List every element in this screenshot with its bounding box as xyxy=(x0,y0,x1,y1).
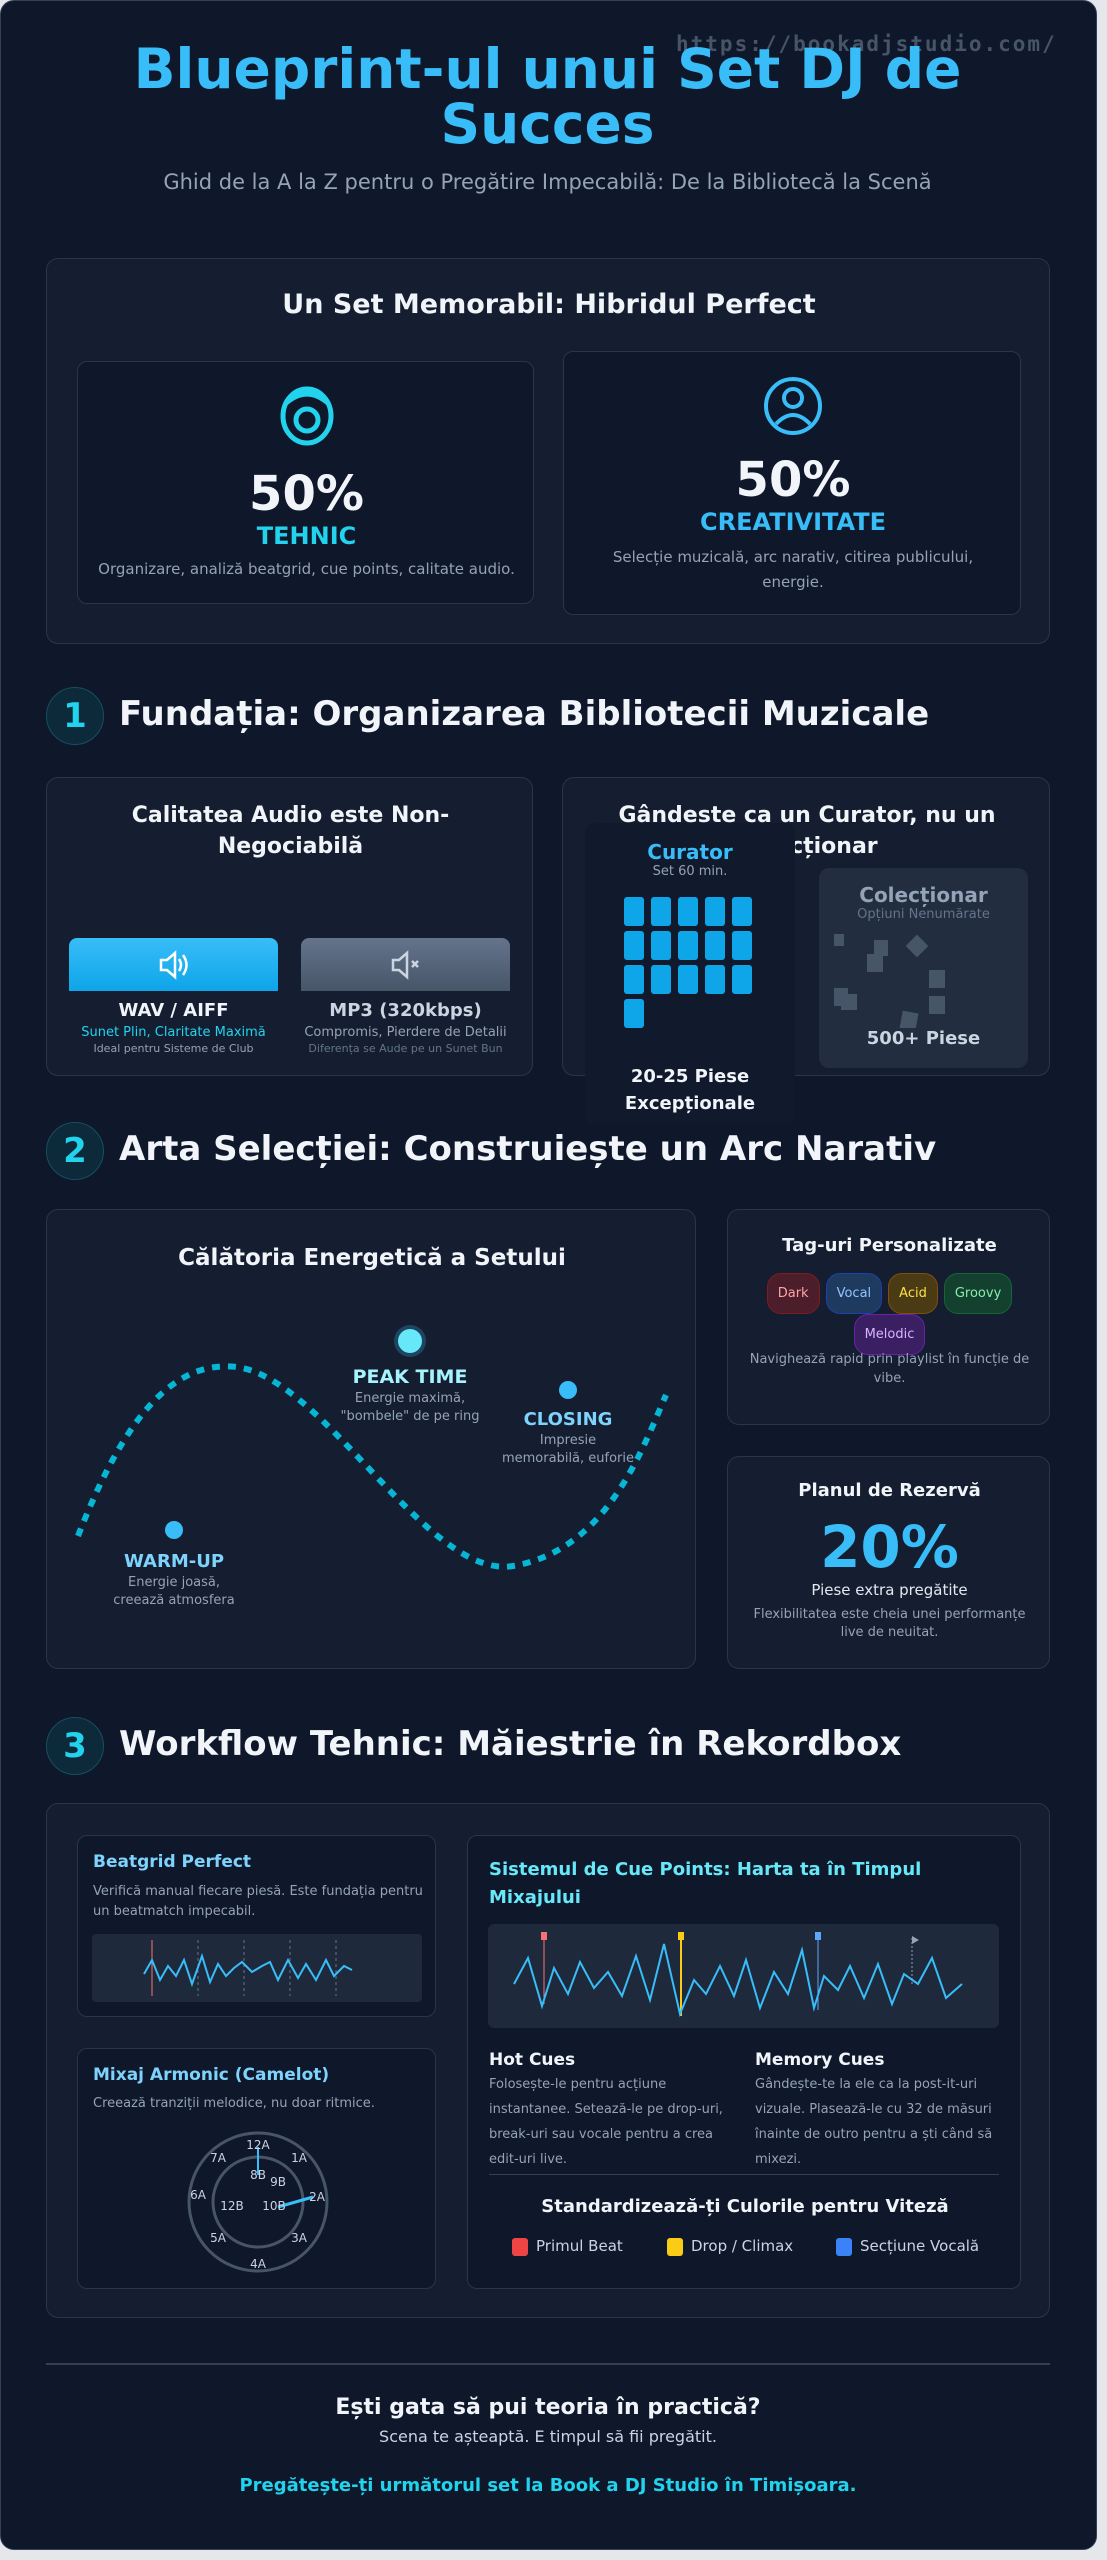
footer cta: Ești gata să pui teoria în practică? xyxy=(335,2395,761,2420)
label peak time: "bombele" de pe ring xyxy=(340,1409,480,1424)
audio heading: Calitatea Audio este Non-Negociabilă xyxy=(132,803,449,859)
stat 50%: 50% xyxy=(249,466,364,522)
title: Blueprint-ul unui Set DJ de xyxy=(134,37,961,101)
track grid xyxy=(624,897,752,1028)
desc: Organizare, analiză beatgrid, cue points, calitate audio. xyxy=(98,560,515,578)
energy curve chart xyxy=(75,1325,669,1570)
label warm-up xyxy=(113,1551,235,1608)
card: camelot: Creează tranziții melodice, nu doar ritmice. xyxy=(93,2096,375,2111)
badge 2 xyxy=(46,1122,104,1180)
title: Succes xyxy=(440,92,654,156)
section 3 header xyxy=(46,1717,901,1775)
card: beatgrid xyxy=(77,1835,436,2017)
hot cues: Hot Cues xyxy=(489,2050,575,2070)
camelot wheel: 10B xyxy=(262,2199,286,2213)
panel: tags xyxy=(727,1209,1050,1425)
panel: energy journey xyxy=(46,1209,696,1669)
label mp3: MP3 (320kbps) xyxy=(329,1000,482,1021)
badge 2: 2 xyxy=(63,1131,87,1171)
scattered squares xyxy=(834,934,945,1028)
color legend xyxy=(512,2237,979,2256)
curator heading: Gândește ca un Curator, nu un Colecționar xyxy=(618,803,996,859)
label peak time xyxy=(340,1366,480,1424)
url watermark: https://bookadjstudio.com/ xyxy=(676,32,1057,56)
camelot wheel: 3A xyxy=(291,2231,308,2245)
icon: gear/headphone xyxy=(280,386,334,446)
badge 1 xyxy=(46,687,104,745)
footer cta: Scena te așteaptă. E timpul să fii pregătit. xyxy=(379,2427,717,2446)
panel: audio quality xyxy=(46,777,533,1076)
hybrid heading: Un Set Memorabil: Hibridul Perfect xyxy=(282,289,816,320)
label warm-up: WARM-UP xyxy=(124,1551,224,1572)
camelot wheel: 8B xyxy=(250,2168,266,2182)
panel: workflow xyxy=(46,1803,1050,2318)
badge 3 xyxy=(46,1717,104,1775)
title xyxy=(134,37,961,156)
card: beatgrid: Verifică manual fiecare piesă. Este fundația pentru un beatmatch impecabil. xyxy=(93,1884,423,1919)
color legend: Drop / Climax xyxy=(691,2237,793,2255)
label mp3: Diferența se Aude pe un Sunet Bun xyxy=(308,1042,503,1055)
beatgrid wave xyxy=(92,1934,422,2002)
color legend: Primul Beat xyxy=(536,2237,623,2255)
box: curator: Curator xyxy=(647,840,733,864)
label tehnic: TEHNIC xyxy=(257,522,356,550)
footer cta: Pregătește-ți următorul set la Book a DJ Studio în Timișoara. xyxy=(239,2475,857,2496)
label peak time: Energie maximă, xyxy=(355,1391,465,1406)
box: colectionar xyxy=(819,868,1028,1068)
memory cues: Memory Cues xyxy=(755,2050,884,2070)
card: beatgrid: Beatgrid Perfect xyxy=(93,1852,251,1872)
card: tehnic xyxy=(77,361,534,604)
panel: hybrid xyxy=(46,258,1050,644)
camelot wheel: 12A xyxy=(246,2138,271,2152)
tag chips: Groovy xyxy=(955,1286,1001,1301)
tags heading: Tag-uri Personalizate xyxy=(782,1235,997,1256)
panel: reserve xyxy=(727,1456,1050,1669)
tag chips: Acid xyxy=(899,1286,927,1301)
box: curator: 20-25 Piese xyxy=(631,1066,749,1087)
reserve heading: Planul de Rezervă xyxy=(798,1480,981,1501)
label wav: Ideal pentru Sisteme de Club xyxy=(93,1042,254,1055)
legend heading: Standardizează-ți Culorile pentru Viteză xyxy=(541,2196,949,2217)
tag chips: Melodic xyxy=(865,1327,914,1342)
subtitle: Ghid de la A la Z pentru o Pregătire Impecabilă: De la Bibliotecă la Scenă xyxy=(163,170,932,194)
memory cues: Gândește-te la ele ca la post-it-uri vizuale. Plasează-le cu 32 de măsuri înainte de outro pentru a ști când să mixezi. xyxy=(755,2077,992,2167)
icon: user xyxy=(764,377,822,435)
label wav: WAV / AIFF xyxy=(118,1000,228,1021)
card: camelot: Mixaj Armonic (Camelot) xyxy=(93,2065,329,2085)
box: curator xyxy=(585,823,795,1125)
label warm-up: Energie joasă, xyxy=(128,1575,220,1590)
card: cue points: Sistemul de Cue Points: Harta ta în Timpul Mixajului xyxy=(489,1859,921,1908)
desc: Selecție muzicală, arc narativ, citirea publicului, energie. xyxy=(613,548,973,591)
card: cue points xyxy=(467,1835,1021,2289)
label wav xyxy=(81,1000,266,1055)
label closing: CLOSING xyxy=(524,1409,612,1430)
heading 2: Arta Selecției: Construiește un Arc Narativ xyxy=(119,1129,936,1169)
label closing: Impresie xyxy=(540,1433,596,1448)
tag chips xyxy=(767,1273,1012,1355)
camelot wheel xyxy=(188,2132,328,2272)
footer cta xyxy=(239,2395,857,2496)
label peak time: PEAK TIME xyxy=(353,1366,467,1388)
box: curator: Set 60 min. xyxy=(653,864,727,879)
color legend: Secțiune Vocală xyxy=(860,2237,979,2255)
panel: curator xyxy=(562,777,1050,1076)
tag chips: Vocal xyxy=(837,1286,871,1301)
camelot wheel: 6A xyxy=(190,2188,207,2202)
label closing: memorabilă, euforie xyxy=(502,1451,634,1466)
box: colectionar: Colecționar xyxy=(859,883,988,907)
badge 3: 3 xyxy=(63,1726,87,1766)
badge 1: 1 xyxy=(63,696,87,736)
label wav: Sunet Plin, Claritate Maximă xyxy=(81,1025,266,1040)
hot cues: Folosește-le pentru acțiune instantanee. Setează-le pe drop-uri, break-uri sau vocale pentru a crea edit-uri live. xyxy=(489,2077,723,2167)
camelot wheel: 9B xyxy=(270,2175,286,2189)
energy heading: Călătoria Energetică a Setului xyxy=(178,1245,566,1271)
card: camelot xyxy=(77,2048,436,2289)
button: mp3 xyxy=(301,938,510,991)
camelot wheel: 7A xyxy=(210,2151,227,2165)
stat 20%: 20% xyxy=(820,1513,959,1581)
box: colectionar: 500+ Piese xyxy=(867,1028,980,1049)
section 2 header xyxy=(46,1122,936,1180)
heading 1: Fundația: Organizarea Bibliotecii Muzicale xyxy=(119,694,929,734)
label mp3 xyxy=(304,1000,507,1055)
label warm-up: creează atmosfera xyxy=(113,1593,235,1608)
card: creativitate xyxy=(563,351,1021,615)
cue waveform xyxy=(488,1924,999,2028)
panel: reserve: Flexibilitatea este cheia unei performanțe live de neuitat. xyxy=(753,1607,1026,1640)
stat 50%: 50% xyxy=(736,452,850,508)
camelot wheel: 4A xyxy=(250,2257,267,2271)
section 1 header xyxy=(46,687,929,745)
tags desc: Navighează rapid prin playlist în funcție de vibe. xyxy=(750,1352,1029,1386)
button: wav xyxy=(69,938,278,991)
camelot wheel: 2A xyxy=(309,2190,326,2204)
camelot wheel: 5A xyxy=(210,2231,227,2245)
reserve text: Piese extra pregătite xyxy=(811,1581,968,1599)
camelot wheel: 1A xyxy=(291,2151,308,2165)
label closing xyxy=(502,1409,634,1466)
label mp3: Compromis, Pierdere de Detalii xyxy=(304,1025,507,1040)
label creativitate: CREATIVITATE xyxy=(700,508,886,536)
box: colectionar: Opțiuni Nenumărate xyxy=(857,907,990,922)
tag chips: Dark xyxy=(778,1286,809,1301)
heading 3: Workflow Tehnic: Măiestrie în Rekordbox xyxy=(119,1724,901,1764)
camelot wheel: 12B xyxy=(220,2199,244,2213)
box: curator: Excepționale xyxy=(625,1093,755,1114)
